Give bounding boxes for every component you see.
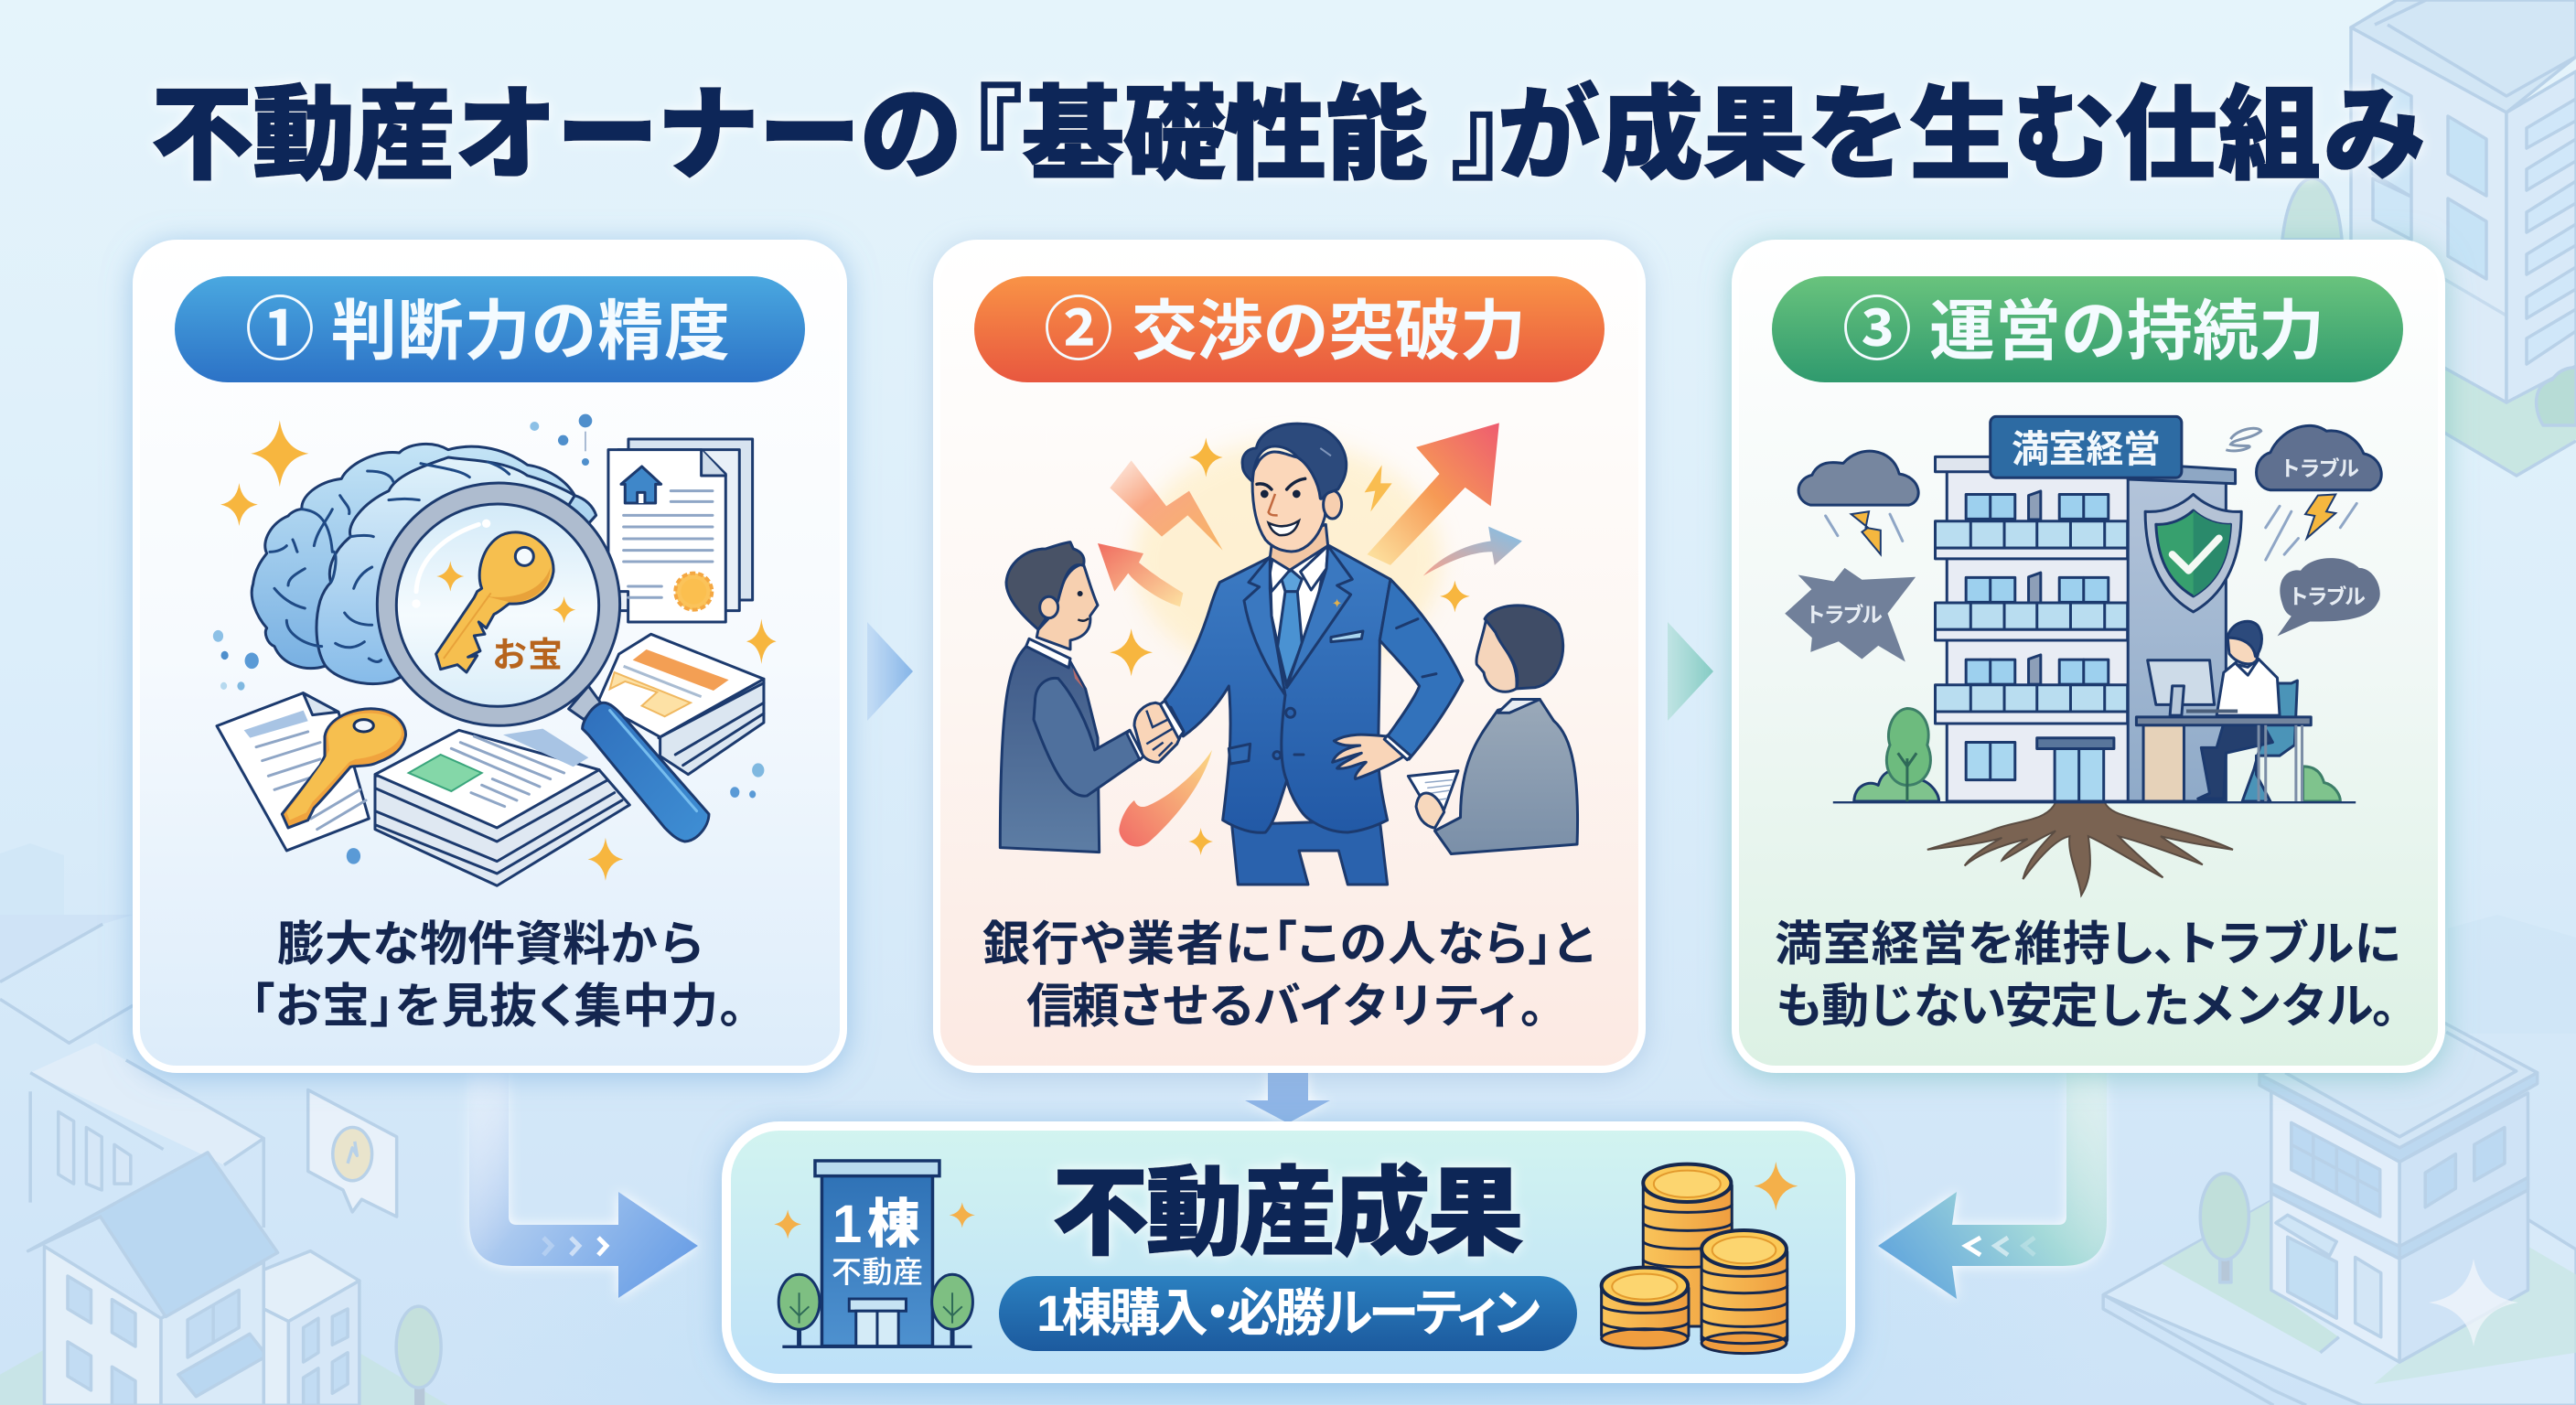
arrow: panel 2 to panel 3 [1668, 622, 1713, 721]
left key [282, 709, 405, 828]
description [1775, 918, 2420, 1034]
panel 1: judgment [136, 243, 843, 1069]
description: 満室経営を維持し、トラブルに [1775, 918, 2400, 971]
sparkles and small bolt [1110, 437, 1392, 855]
magnifier lens [377, 483, 620, 725]
description [982, 918, 1594, 1034]
illustration: sparkles and dots [213, 420, 777, 881]
left storm cloud [1798, 451, 1918, 554]
illustration: handshake and main businessman [1000, 424, 1463, 885]
heading pill [1772, 276, 2403, 382]
description: も動じない安定したメンタル。 [1776, 981, 2420, 1034]
heading pill [974, 276, 1605, 382]
description: 「お宝」を見抜く集中力。 [251, 981, 743, 1034]
building label: 不動産 [832, 1255, 923, 1289]
brain [252, 444, 596, 684]
description: 信頼させるバイタリティ。 [1026, 981, 1568, 1034]
flow arrow: panel 1 to result [469, 1072, 698, 1298]
facial features [1261, 490, 1269, 498]
building right wing [2128, 463, 2236, 801]
lapels [1244, 556, 1285, 695]
shield [2145, 494, 2241, 612]
main businessman [1165, 424, 1463, 885]
trees [778, 1274, 972, 1346]
title: 不動産オーナーの『基礎性能』が成果を生む仕組み [151, 78, 2426, 192]
energy glow [1133, 442, 1442, 678]
up arrow [1367, 423, 1499, 565]
background: bottom left buildings [0, 915, 448, 1405]
left arrow [1098, 543, 1183, 606]
left stack [1602, 1268, 1689, 1348]
trousers [1232, 820, 1388, 885]
floors [1936, 491, 2128, 801]
building left wing [1936, 456, 2131, 801]
chevrons [543, 1238, 606, 1255]
building label: 1棟 [832, 1195, 920, 1254]
card [937, 243, 1642, 1069]
left document [217, 693, 369, 851]
ground line [1833, 801, 2356, 803]
top right cloud [2226, 425, 2381, 560]
background: bottom right building [2103, 1023, 2576, 1405]
heading pill [175, 276, 805, 382]
heading pill: ② [1044, 292, 1113, 370]
lightning [1110, 460, 1223, 551]
building label [832, 1195, 923, 1289]
hand on hip [1333, 735, 1404, 779]
right speech cloud [2277, 558, 2380, 636]
description: 銀行や業者に「この人なら」と [982, 918, 1594, 971]
jacket [1165, 546, 1390, 832]
burst bubble [1785, 568, 1916, 661]
sparkles [1440, 580, 1470, 613]
heading pill: 運営の持続力 [1929, 295, 2324, 369]
right colleague [1408, 606, 1578, 854]
illustration: apartment building and roots [1785, 416, 2381, 896]
sub pill: 1棟購入・必勝ルーティン [1036, 1284, 1540, 1342]
neck [1270, 524, 1328, 570]
left businessman [1000, 542, 1143, 853]
result box [726, 1126, 1851, 1378]
magnifier handle [569, 686, 709, 842]
building icon [774, 1161, 975, 1348]
coin stacks [1602, 1162, 1798, 1354]
right plan stack [597, 634, 764, 775]
key in lens [436, 532, 553, 672]
flow arrow: panel 3 to result [1878, 1072, 2107, 1299]
back stack [1643, 1164, 1732, 1326]
heading pill: 判断力の精度 [331, 295, 730, 369]
roots [1927, 802, 2233, 896]
office worker at desk [2136, 621, 2311, 801]
face [1252, 452, 1326, 552]
trouble label: top right cloud: トラブル [2280, 456, 2359, 480]
hair [1242, 424, 1347, 499]
trouble label: burst: トラブル [1805, 603, 1883, 627]
background: white sparkle [2429, 1259, 2518, 1346]
key label: お宝 [492, 637, 563, 675]
panel 3: management [1735, 243, 2442, 1069]
dots [530, 414, 592, 466]
shirt and collar [1270, 549, 1326, 686]
right arm [1379, 579, 1463, 759]
heading pill: 交渉の突破力 [1132, 295, 1526, 369]
description [251, 918, 743, 1034]
arrow: panel 1 to panel 2 [867, 622, 913, 721]
document stack with house [608, 439, 753, 622]
heading pill: ① [245, 292, 315, 370]
card [136, 243, 843, 1069]
illustration: energy arrows, sparkles and right colleague [1133, 423, 1578, 854]
description: 膨大な物件資料から [277, 918, 705, 971]
jacket details [1331, 631, 1363, 642]
sign text: 満室経営 [2012, 428, 2161, 470]
handshake [1134, 701, 1184, 762]
bushes and tree [1854, 709, 2340, 801]
flow arrow: panel 2 to result [1245, 1072, 1330, 1123]
panel 2: negotiation [937, 243, 1642, 1069]
flame [1119, 750, 1212, 846]
heading pill: ③ [1842, 292, 1912, 370]
container [726, 1126, 1851, 1378]
chevrons [1966, 1238, 2034, 1255]
sign board [1991, 416, 2182, 477]
trouble label: speech cloud: トラブル [2288, 585, 2366, 608]
sub pill [999, 1276, 1577, 1351]
flat document stack [375, 729, 629, 885]
right stack [1701, 1230, 1787, 1354]
result heading: 不動産成果 [1052, 1160, 1524, 1268]
illustration: brain, magnifier, key and documents [217, 414, 764, 885]
background: top right building [2282, 0, 2576, 476]
card [1735, 243, 2442, 1069]
right swoosh arrow [1423, 527, 1522, 576]
